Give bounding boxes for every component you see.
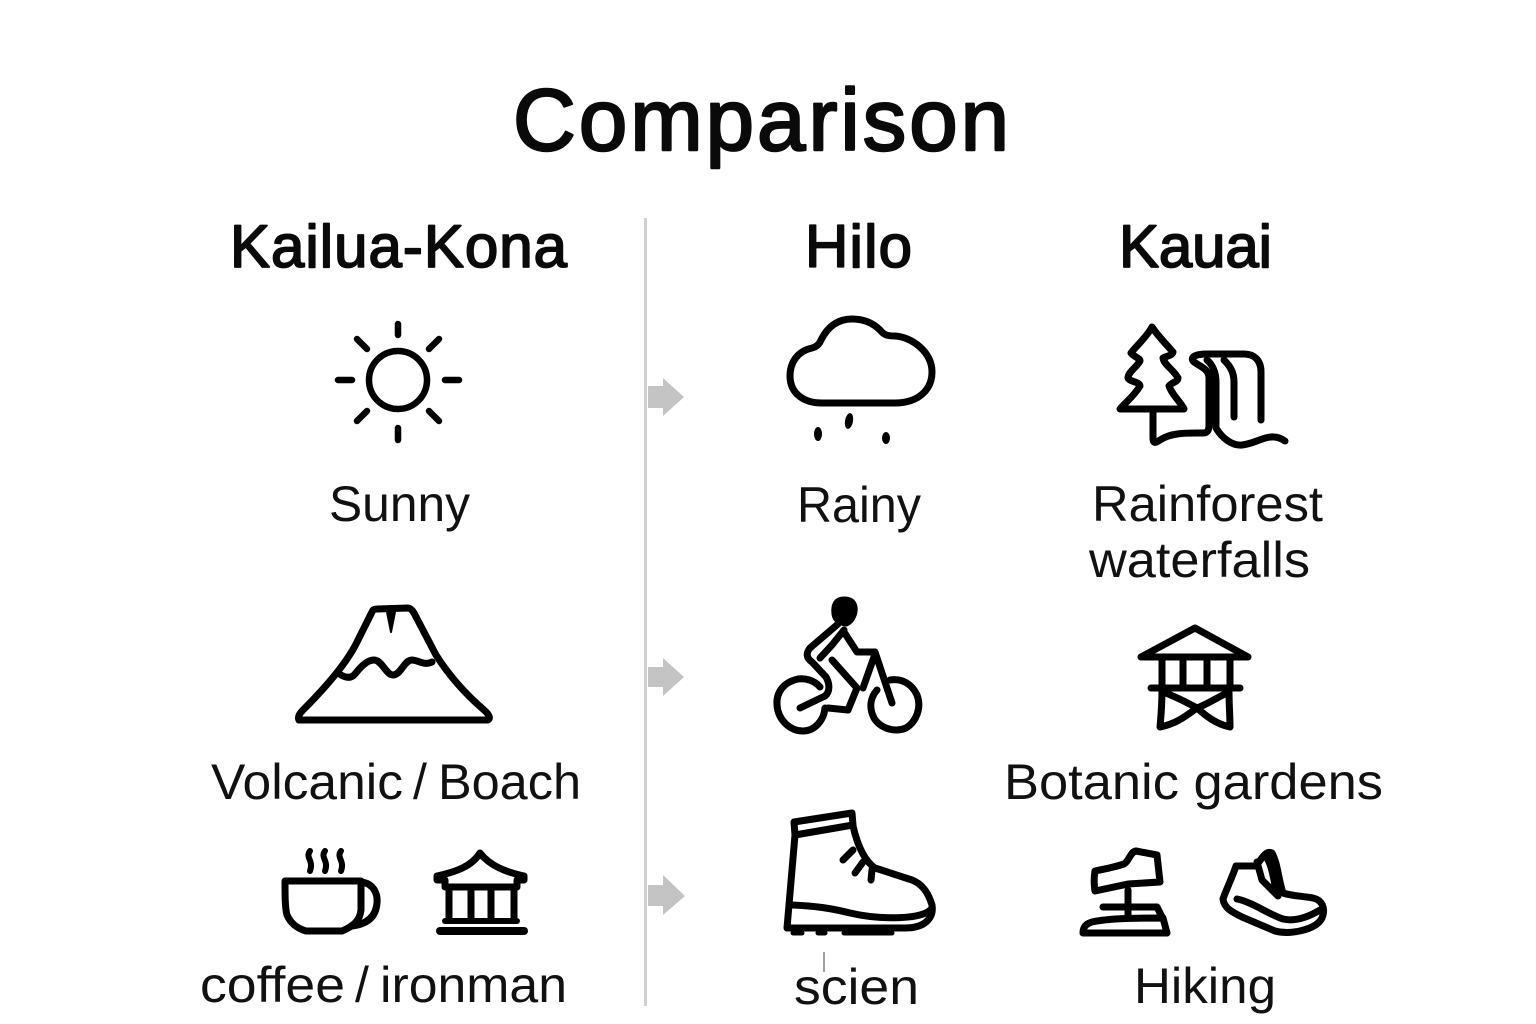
label: Volcanic / Boach: / xyxy=(413,754,427,810)
label: Volcanic / Boach: Volcanic xyxy=(211,754,403,810)
arrow: row 2 xyxy=(648,658,684,696)
icon: tree and waterfall xyxy=(1120,327,1285,445)
column heading: Kauai: Kauai xyxy=(1119,213,1272,280)
vertical divider xyxy=(644,218,647,1006)
label: Volcanic / Boach: Boach xyxy=(438,754,581,810)
label: Rainforest waterfalls: Rainforest xyxy=(1092,476,1323,532)
icon: cyclist xyxy=(777,600,919,731)
label: Rainy: Rainy xyxy=(797,477,921,533)
column heading: Kailua-Kona: Kailua-Kona xyxy=(230,213,568,280)
label: coffee / ironman xyxy=(200,957,567,1013)
icon: hiking boot xyxy=(787,813,932,933)
raindrops xyxy=(814,412,890,444)
label: scien: scien xyxy=(794,959,919,1015)
label: Rainforest waterfalls: waterfalls xyxy=(1088,532,1310,588)
label: Rainforest waterfalls xyxy=(1088,476,1323,588)
icon: volcano xyxy=(298,608,489,720)
label: Sunny: Sunny xyxy=(329,476,470,532)
label: Hiking: Hiking xyxy=(1134,958,1276,1014)
label: Botanic gardens: Botanic gardens xyxy=(1004,754,1383,810)
arrow: row 3 xyxy=(648,875,685,915)
icon: hiking shoe xyxy=(1223,852,1324,932)
icon: tower pavilion xyxy=(1141,628,1248,727)
icon: sun xyxy=(338,324,459,440)
arrow: row 1 xyxy=(648,378,684,416)
label: Volcanic / Boach xyxy=(211,754,581,810)
icon: rain cloud xyxy=(790,319,932,444)
icon: temple xyxy=(437,853,524,931)
label: coffee / ironman: ironman xyxy=(380,957,567,1013)
column heading: Hilo: Hilo xyxy=(805,213,912,280)
label: coffee / ironman: / xyxy=(355,957,369,1013)
icon: coffee cup xyxy=(285,851,377,931)
title: Comparison xyxy=(513,72,1009,169)
steam xyxy=(308,851,342,871)
icon: hiking signpost xyxy=(1083,851,1167,933)
label: coffee / ironman: coffee xyxy=(200,957,345,1013)
tick above scien xyxy=(823,952,825,972)
